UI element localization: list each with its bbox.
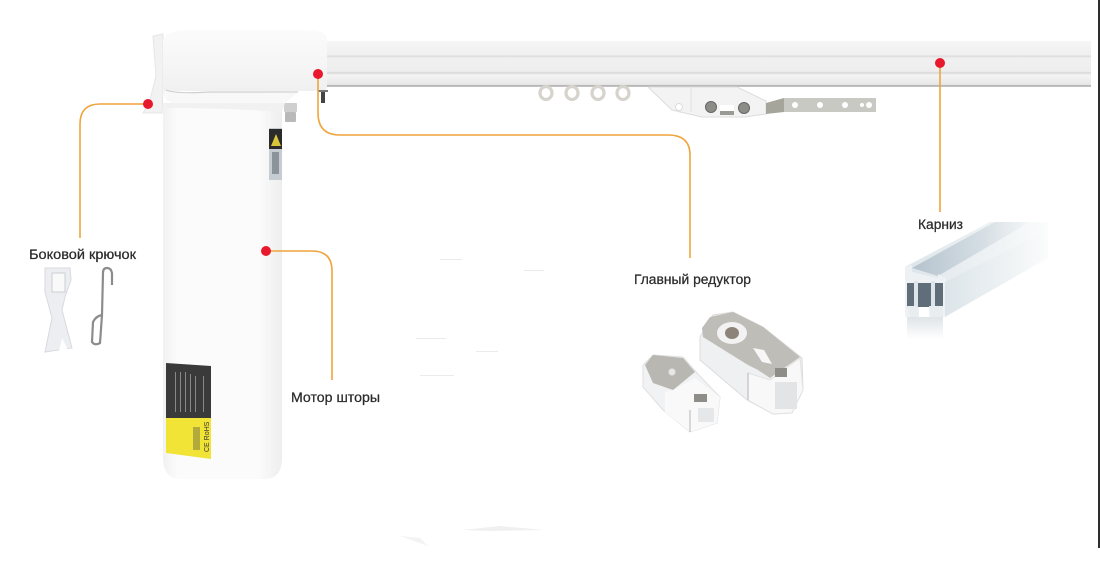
motor tube [163,103,285,479]
label: curtain motor: Мотор шторы [291,390,380,405]
callout: main gearbox [313,69,690,258]
motor housing [143,30,328,122]
certification marks: CE RoHS [204,421,211,452]
icon: small gearbox [643,355,720,432]
label: side hook: Боковой крючок [29,247,136,262]
label: rail: Карниз [918,217,963,232]
callout: side hook [80,99,153,238]
icon: side hook bracket [45,268,72,352]
icon: rail profile [905,222,1048,339]
curtain rail [322,41,1091,87]
icon: S hook [92,268,112,344]
reflection [907,317,943,339]
label: main gearbox: Главный редуктор [634,272,751,287]
right edge line [1098,0,1100,548]
callout: curtain motor [261,246,332,380]
master carrier arm [648,87,876,117]
callout: rail [935,58,945,212]
curtain gliders [540,86,629,100]
spec label [166,363,211,459]
faint artifacts [400,259,545,546]
warning label [269,128,282,180]
icon: large gearbox [700,312,803,414]
